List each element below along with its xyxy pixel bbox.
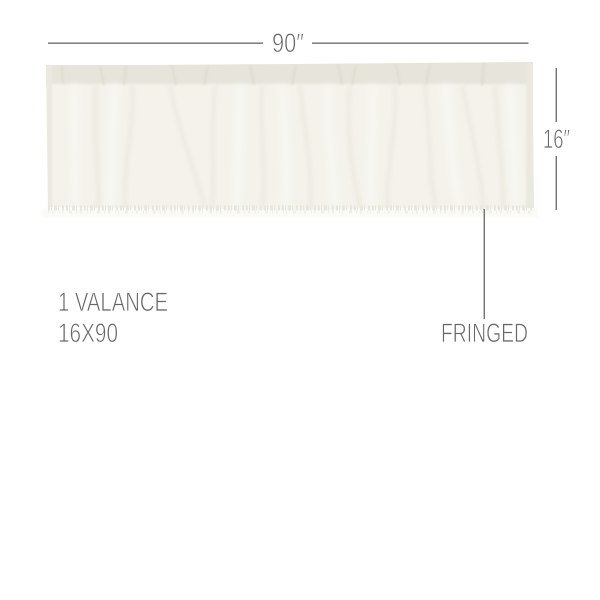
callout label: FRINGED — [441, 318, 528, 348]
curtain valance — [40, 58, 540, 218]
fringed callout — [441, 209, 528, 348]
width label: 90″ — [272, 28, 304, 58]
curtain soft shadow — [42, 208, 538, 218]
quantity label: 1 VALANCE — [58, 287, 168, 317]
curtain body — [46, 62, 534, 210]
height line bottom — [556, 156, 557, 210]
width line left — [48, 42, 263, 44]
size label: 16X90 — [58, 318, 118, 348]
width line right — [312, 42, 528, 44]
height line top — [556, 68, 557, 122]
height label: 16″ — [543, 124, 570, 154]
product description — [58, 287, 168, 348]
fringe edge — [48, 208, 534, 212]
curtain folds and header — [40, 58, 540, 212]
callout leader line — [484, 209, 485, 319]
